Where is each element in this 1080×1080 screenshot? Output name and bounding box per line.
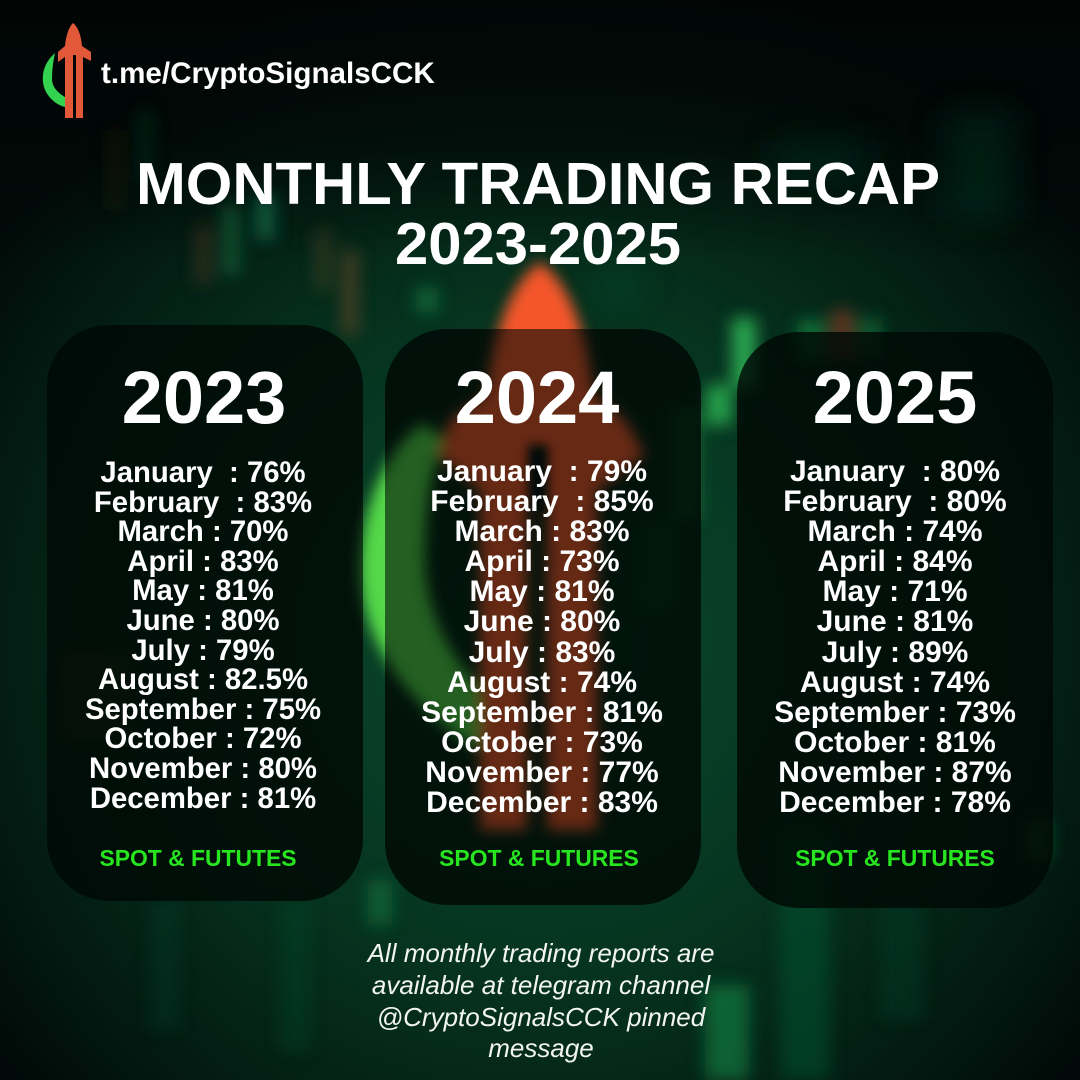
year heading 2023: 2023 — [122, 356, 286, 439]
tag: spot and futures 2023: SPOT & FUTUTES — [99, 845, 297, 871]
year heading 2024: 2024 — [455, 356, 619, 439]
logo: rocket and crescent — [42, 23, 91, 118]
panel: 2023 — [47, 325, 363, 901]
footer note: message — [488, 1033, 594, 1063]
monthly results 2023: January : 76% February : 83% March : 70% April : 83% May : 81% June : 80% July : 79% August : 82.5% September : 75% October : 72% November : 80% December : 81% — [85, 456, 321, 815]
monthly results 2024: January : 79% February : 85% March : 83% April : 73% May : 81% June : 80% July : 83% August : 74% September : 81% October : 73% November : 77% December : 83% — [421, 455, 663, 819]
title — [136, 150, 940, 277]
footer note — [366, 938, 714, 1063]
tag: spot and futures 2024: SPOT & FUTURES — [439, 845, 639, 871]
panel: 2025 — [737, 332, 1053, 908]
footer note: available at telegram channel — [372, 970, 710, 1000]
title: MONTHLY TRADING RECAP — [136, 150, 940, 217]
title: 2023-2025 — [395, 210, 681, 277]
monthly results 2025: January : 80% February : 80% March : 74% April : 84% May : 71% June : 81% July : 89% August : 74% September : 73% October : 81% November : 87% December : 78% — [774, 455, 1016, 819]
footer note: All monthly trading reports are — [368, 938, 714, 968]
year heading 2025: 2025 — [813, 356, 977, 439]
tag: spot and futures 2025: SPOT & FUTURES — [795, 845, 995, 871]
channel link: t.me/CryptoSignalsCCK — [101, 57, 435, 90]
footer note: @CryptoSignalsCCK pinned — [377, 1002, 705, 1032]
panel: 2024 — [385, 329, 701, 905]
